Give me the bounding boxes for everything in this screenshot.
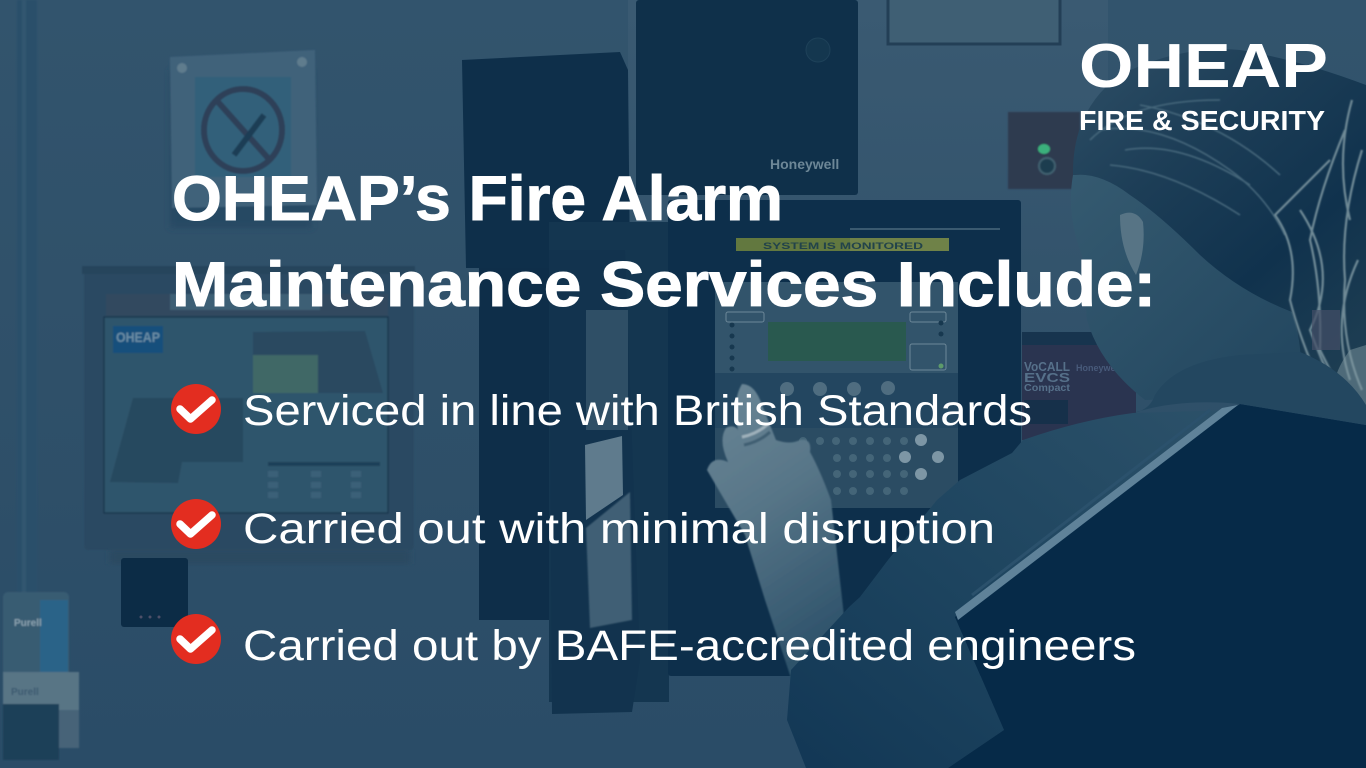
wall card reader — [121, 558, 188, 627]
VoCALL EVCS unit: EVCS — [1024, 370, 1070, 385]
main fire alarm control panel — [668, 200, 1021, 676]
jacket back — [948, 404, 1366, 768]
VoCALL EVCS unit: Honeywell — [1076, 363, 1121, 373]
no smoking sign — [170, 50, 317, 228]
hand sanitiser dispenser: Purell — [14, 618, 42, 629]
logo: OHEAP Fire & Security — [1079, 32, 1328, 136]
checklist — [171, 384, 1136, 670]
item text: Carried out with minimal disruption — [243, 505, 995, 553]
item 1: British Standards — [171, 384, 1032, 435]
map panel frame — [82, 266, 415, 564]
logo strapline: FIRE & SECURITY — [1079, 105, 1325, 136]
collar — [1133, 352, 1366, 425]
engineer's jacket — [787, 352, 1366, 768]
heading line 2: Maintenance Services Include: — [172, 250, 1156, 320]
panel status label — [736, 238, 949, 252]
function buttons — [780, 381, 895, 396]
VoCALL EVCS unit: VoCALL — [1024, 359, 1070, 374]
grey control fascia — [715, 282, 958, 508]
heading line 1: OHEAP’s Fire Alarm — [172, 164, 783, 234]
engineer's head and neck — [1071, 49, 1366, 425]
wall conduit pipe — [17, 0, 37, 600]
hair — [1073, 49, 1366, 420]
hand sanitiser dispenser: Purell — [11, 687, 39, 698]
map panel frame: OHEAP — [116, 329, 160, 345]
item text: Serviced in line with British Standards — [243, 387, 1032, 435]
keypad — [799, 437, 908, 495]
VoCALL EVCS unit — [1022, 332, 1136, 440]
icon: red check — [171, 384, 221, 434]
panel status label: SYSTEM IS MONITORED — [763, 241, 923, 252]
LCD display — [768, 322, 906, 361]
VoCALL EVCS unit: Compact — [1024, 383, 1071, 394]
top Honeywell enclosure: Honeywell — [770, 156, 839, 172]
item text: Carried out by BAFE-accredited engineers — [243, 622, 1136, 670]
top right wall plate — [888, 0, 1060, 44]
top Honeywell enclosure — [636, 0, 858, 195]
icon: red check — [171, 614, 221, 664]
item 3: BAFE-accredited engineers — [171, 614, 1136, 670]
engineer's hand on keypad — [707, 384, 845, 690]
icon: red check — [171, 499, 221, 549]
hand sanitiser dispenser — [3, 592, 79, 760]
logo wordmark: OHEAP — [1079, 32, 1328, 101]
sleeve — [787, 410, 1230, 768]
item 2: minimal disruption — [171, 499, 995, 553]
dark enclosure box — [462, 52, 669, 714]
red key switch box — [1008, 112, 1080, 189]
jacket stripe — [955, 405, 1238, 620]
heading — [172, 164, 1156, 320]
